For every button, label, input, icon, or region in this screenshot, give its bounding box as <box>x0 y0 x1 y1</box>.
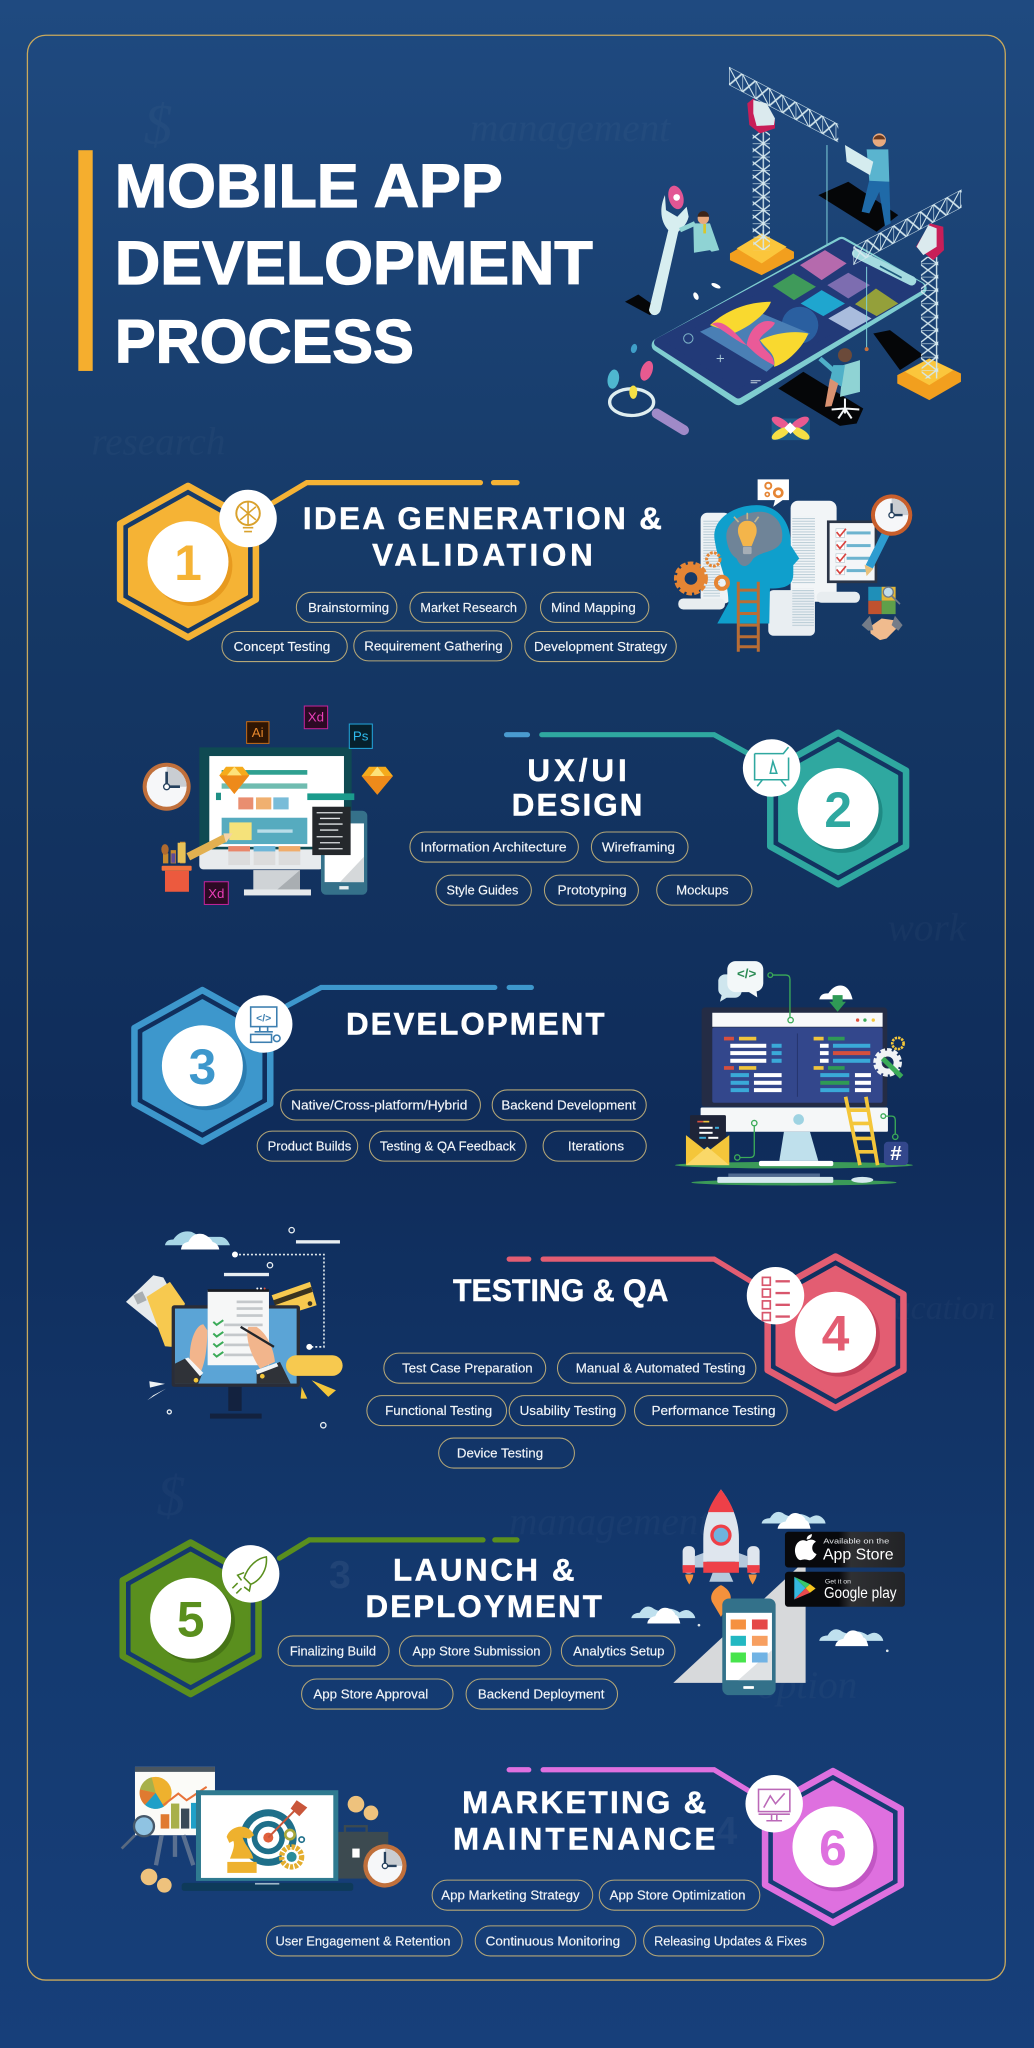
connector line 6 <box>509 1770 751 1792</box>
heading 6: MARKETING & <box>462 1785 706 1820</box>
pill: Development Strategy <box>534 640 668 654</box>
pills 3 <box>257 1090 646 1161</box>
pill <box>436 875 531 905</box>
pill <box>525 632 676 662</box>
heading 2: UX/UI <box>527 753 627 788</box>
pill: Mockups <box>676 884 729 898</box>
pill: Backend Deployment <box>478 1688 605 1702</box>
icon: rocket <box>222 1545 279 1603</box>
pill: Functional Testing <box>385 1404 492 1418</box>
pill <box>296 592 397 622</box>
pill <box>540 592 649 622</box>
pill: Style Guides <box>446 884 518 898</box>
badge: app store <box>785 1532 905 1567</box>
pill: Requirement Gathering <box>364 639 503 653</box>
background doodles: work <box>888 906 967 949</box>
illustration 3: coding monitor <box>675 961 913 1185</box>
icon: Ai <box>247 722 269 743</box>
hexagon badge 4: 4 <box>822 1306 850 1362</box>
pill <box>634 1396 787 1426</box>
heading 5 <box>366 1552 602 1624</box>
hexagon badge 6: 6 <box>819 1820 847 1876</box>
icon: blueprint <box>743 739 800 797</box>
badge: google play: Get it on <box>825 1579 851 1585</box>
pill: Mind Mapping <box>551 601 636 615</box>
pill: User Engagement & Retention <box>275 1934 450 1948</box>
pill: Finalizing Build <box>290 1645 376 1659</box>
icon: Ps <box>349 724 372 748</box>
title accent bar <box>78 150 93 371</box>
pill: App Store Submission <box>413 1645 541 1659</box>
pill: Information Architecture <box>420 841 567 855</box>
pill: Backend Development <box>501 1099 636 1113</box>
step 5: launch and deployment <box>123 1489 905 1709</box>
pill <box>384 1353 546 1383</box>
background doodles: 3 <box>329 1554 351 1597</box>
step 3: development <box>134 961 913 1185</box>
pill: Native/Cross-platform/Hybrid <box>291 1099 467 1113</box>
icon: Xd: Xd <box>308 710 324 725</box>
pill: Brainstorming <box>308 601 389 615</box>
pill <box>367 1396 507 1426</box>
icon: Xd small <box>204 882 228 904</box>
pill <box>475 1926 636 1956</box>
background doodles: management <box>470 107 671 150</box>
hexagon badge 2: 2 <box>824 782 852 838</box>
step 4: testing and qa <box>126 1228 903 1468</box>
pill: App Store Approval <box>313 1688 428 1702</box>
step 1: idea generation and validation <box>120 479 912 662</box>
heading 3: DEVELOPMENT <box>346 1006 604 1041</box>
step 2: ux ui design <box>143 706 906 905</box>
title: DEVELOPMENT <box>115 229 593 298</box>
heading 2: DESIGN <box>512 788 642 823</box>
pill <box>354 631 512 661</box>
pill <box>439 1438 574 1468</box>
badge: google play <box>785 1572 905 1607</box>
pill: Continuous Monitoring <box>486 1934 620 1948</box>
pill: Wireframing <box>602 841 675 855</box>
heading 4: TESTING & QA <box>453 1273 668 1308</box>
pill: Testing & QA Feedback <box>380 1140 516 1154</box>
heading 1: IDEA GENERATION & <box>303 501 662 536</box>
heading 1 <box>303 501 662 573</box>
illustration 2: design workstation <box>143 706 393 904</box>
icon: Ai: Ai <box>252 725 264 740</box>
pills 1 <box>222 592 676 662</box>
step 6: marketing and maintenance <box>122 1767 901 1956</box>
pill <box>561 1636 675 1666</box>
illustration 3: coding monitor: # <box>890 1142 902 1165</box>
badge: google play: Google play <box>824 1585 897 1602</box>
icon: brain bulb <box>219 490 277 547</box>
connector dash 2 <box>507 733 527 737</box>
pill <box>410 592 526 622</box>
background doodles: management <box>509 1501 710 1544</box>
pill <box>410 832 578 862</box>
heading 5: DEPLOYMENT <box>366 1589 602 1624</box>
pills 2 <box>410 832 752 905</box>
hero illustration: phone and cranes <box>606 67 962 442</box>
hexagon badge 3: 3 <box>189 1039 216 1095</box>
hexagon badge 2 <box>770 733 906 884</box>
pill <box>492 1090 646 1120</box>
icon: Xd <box>304 706 328 729</box>
heading 1: VALIDATION <box>372 538 593 573</box>
icon: analytics monitor <box>745 1775 803 1832</box>
pill: App Store Optimization <box>610 1889 746 1903</box>
background doodles: option <box>757 1664 857 1707</box>
illustration 4: testing monitor <box>126 1228 343 1428</box>
hexagon badge 5 <box>123 1543 258 1694</box>
icon: Ps: Ps <box>353 729 369 744</box>
heading 6 <box>453 1785 715 1856</box>
background doodles: $ <box>144 94 172 157</box>
badge: app store: Available on the <box>823 1536 889 1545</box>
pill: Performance Testing <box>651 1404 776 1418</box>
pill <box>302 1679 453 1709</box>
pill <box>400 1636 551 1666</box>
pill: Test Case Preparation <box>402 1362 533 1376</box>
heading 6: MAINTENANCE <box>453 1821 715 1856</box>
pill <box>222 632 347 662</box>
pill <box>657 875 752 905</box>
hexagon badge 3 <box>134 990 270 1142</box>
background doodles: 4 <box>715 1810 737 1853</box>
illustration 5: rocket and phone <box>631 1489 905 1695</box>
pill: App Marketing Strategy <box>441 1889 580 1903</box>
connector line 1 <box>273 483 517 503</box>
background doodles: $ <box>157 1465 185 1528</box>
pills 6 <box>266 1880 824 1956</box>
illustration 1: idea head <box>677 479 912 652</box>
illustration 6: marketing board and laptop <box>122 1767 407 1893</box>
pill <box>543 1131 646 1161</box>
hexagon badge 1: 1 <box>174 535 202 591</box>
pill <box>432 1880 593 1910</box>
pill <box>557 1353 756 1383</box>
pill <box>644 1926 824 1956</box>
icon: code monitor: </> <box>256 1013 271 1024</box>
heading 5: LAUNCH & <box>393 1552 574 1587</box>
badge: app store: App Store <box>823 1546 894 1563</box>
pill <box>509 1396 625 1426</box>
hexagon badge 4 <box>768 1256 903 1408</box>
pill: Manual & Automated Testing <box>576 1362 745 1376</box>
pill <box>369 1131 526 1161</box>
background doodles: research <box>91 421 225 464</box>
background doodles: education <box>862 1290 995 1327</box>
pill <box>257 1131 358 1161</box>
connector line 4 <box>509 1259 751 1281</box>
pill: Usability Testing <box>520 1404 616 1418</box>
pill <box>266 1926 462 1956</box>
pill <box>281 1090 480 1120</box>
pill: Concept Testing <box>234 640 330 654</box>
pill: Prototyping <box>557 884 627 898</box>
connector line 5 <box>279 1540 517 1558</box>
pill: Iterations <box>568 1140 624 1154</box>
pill: Device Testing <box>457 1447 543 1461</box>
pill: Product Builds <box>268 1140 351 1154</box>
title: MOBILE APP <box>115 152 503 221</box>
pill <box>591 832 688 862</box>
pill <box>278 1636 389 1666</box>
icon: checklist <box>747 1267 804 1324</box>
title <box>115 152 593 376</box>
icon: Xd small: Xd <box>208 886 224 901</box>
heading 2 <box>512 753 642 823</box>
title: PROCESS <box>115 307 414 376</box>
pill <box>544 875 638 905</box>
pill <box>466 1679 618 1709</box>
hexagon badge 1 <box>120 486 256 637</box>
connector line 3 <box>287 987 531 1006</box>
pill: Market Research <box>420 601 517 615</box>
pills 4 <box>367 1353 787 1468</box>
hexagon badge 6 <box>765 1771 901 1923</box>
hexagon badge 5: 5 <box>177 1592 204 1648</box>
icon: code monitor <box>235 995 292 1053</box>
illustration 3: coding monitor: </> <box>737 966 756 981</box>
background doodles <box>91 94 995 1853</box>
pill <box>599 1880 760 1910</box>
connector line 2 <box>542 735 751 755</box>
pill: Releasing Updates & Fixes <box>654 1934 807 1948</box>
pills 5 <box>278 1636 675 1709</box>
pill: Analytics Setup <box>573 1645 665 1659</box>
